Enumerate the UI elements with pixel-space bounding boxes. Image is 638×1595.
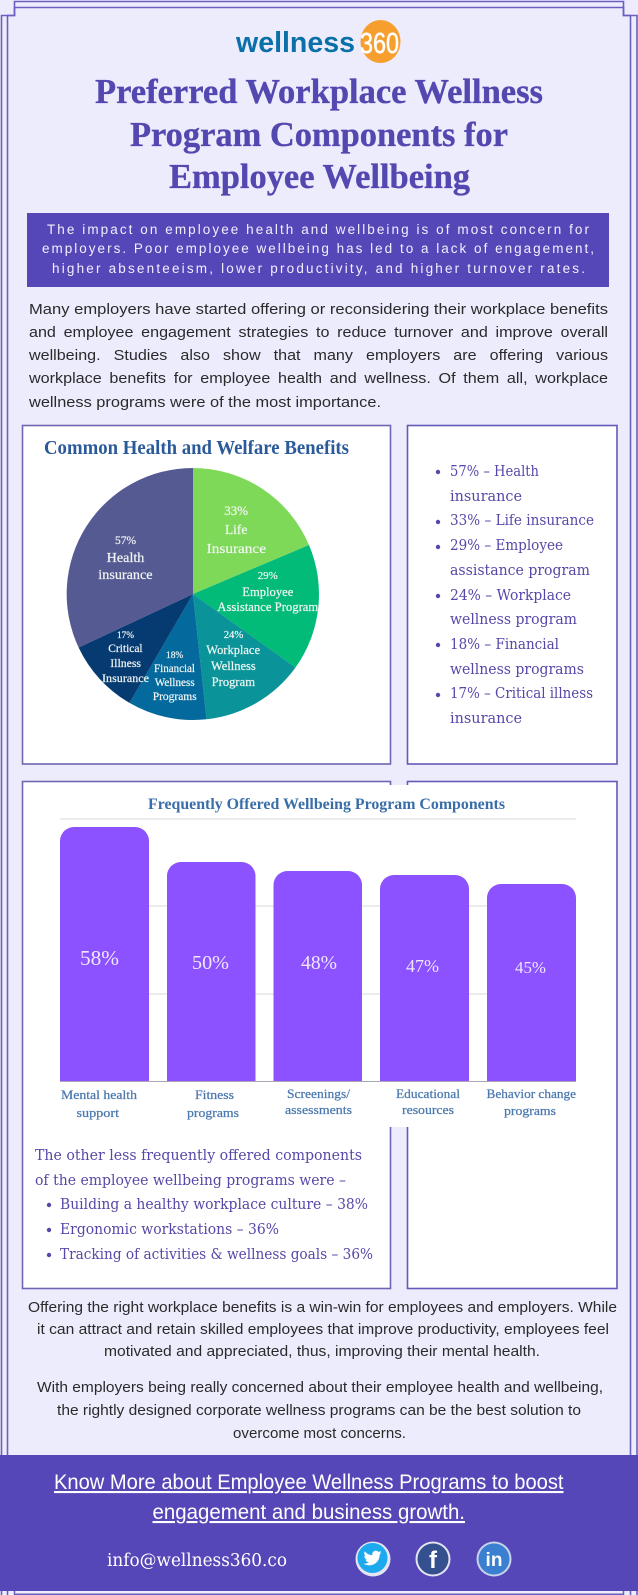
icon: linkedin [476,1542,512,1576]
bar category labels [61,1086,576,1120]
bar chart [60,796,576,1120]
pie chart: 18% [166,651,183,661]
bar values [80,946,546,977]
footer call to action [54,1471,564,1524]
bar category labels: Mental health [61,1087,138,1102]
pie chart: Wellness [211,659,256,673]
closing paragraph 2: the rightly designed corporate wellness programs can be the best solution to [57,1403,581,1419]
other components text: Tracking of activities & wellness goals – 36% [60,1245,373,1263]
icon: twitter [356,1542,390,1576]
panel: benefits list: wellness programs [450,660,584,678]
bar category labels: Screenings/ [287,1086,350,1101]
intro banner: higher absenteeism, lower productivity, and higher turnover rates. [52,261,585,276]
panel: benefits list: 29% – Employee [450,536,563,554]
bar category labels: assessments [285,1102,352,1117]
closing paragraph 1: it can attract and retain skilled employees that improve productivity, employees feel [37,1322,609,1338]
icon: facebook: f [429,1547,438,1574]
pie chart: Life [225,523,247,538]
pie chart: Wellness [155,677,195,689]
bar values: 47% [406,956,439,976]
bar category labels: Educational [396,1086,460,1101]
panel: bar chart and other components, left box [22,782,390,1288]
pie chart: Program [212,675,255,689]
panel: benefits list: insurance [450,487,522,505]
intro banner [27,213,609,287]
closing paragraph 1 [28,1300,617,1360]
footer call to action: engagement and business growth. [152,1501,465,1524]
pie chart: Insurance [102,673,149,685]
closing paragraph 2 [37,1380,603,1442]
pie chart: Health [107,550,145,565]
bar category labels: Behavior change [486,1086,576,1101]
icon: facebook [416,1542,450,1576]
title [95,72,543,196]
bar chart heading: Frequently Offered Wellbeing Program Components [148,796,505,813]
bar category labels: resources [402,1102,454,1117]
pie chart heading: Common Health and Welfare Benefits [44,437,349,459]
intro banner: employers. Poor employee wellbeing has led to a lack of engagement, [42,241,594,256]
bar values: 58% [80,946,119,970]
other components text: of the employee wellbeing programs were – [35,1171,346,1189]
panel: benefits list: 18% – Financial [450,635,559,653]
pie chart: Insurance [207,542,266,557]
other components text: The other less frequently offered components [35,1146,362,1164]
panel: benefits list: 24% – Workplace [450,586,571,604]
title: Employee Wellbeing [169,157,470,196]
pie chart: Programs [153,691,197,703]
pie chart: Employee [242,585,294,599]
pie chart: 24% [224,629,243,641]
panel: benefits list: assistance program [450,561,590,579]
other components text: Building a healthy workplace culture – 38% [60,1195,368,1213]
pie chart [67,468,319,720]
panel: empty right box behind bar chart [389,782,617,1288]
pie chart: 33% [224,503,248,518]
bar values: 45% [515,958,546,977]
pie chart: Illness [110,658,142,670]
intro paragraph: Many employers have started offering or reconsidering their workplace benefits [29,301,608,318]
closing paragraph 2: overcome most concerns. [233,1426,406,1442]
panel: benefits list: 33% – Life insurance [450,511,594,529]
closing paragraph 1: motivated and appreciated, thus, improving their mental health. [104,1344,540,1360]
logo: wellness360 [235,20,400,63]
bars [60,827,576,1081]
pie chart: 29% [258,570,278,582]
intro paragraph: workplace benefits for employee health and wellness. Of them all, workplace [28,370,608,387]
intro paragraph [28,301,608,411]
intro banner: The impact on employee health and wellbeing is of most concern for [47,222,590,237]
bar category labels: programs [504,1103,556,1118]
title: Preferred Workplace Wellness [95,72,543,111]
other components text [35,1146,373,1263]
panel: pie chart [22,426,390,764]
decorative bottom frame [14,1591,624,1594]
bar values: 48% [301,953,337,974]
pie chart: Financial [154,663,195,675]
panel: benefits list [408,426,617,764]
pie chart: insurance [98,567,153,582]
panel: benefits list: insurance [450,709,522,727]
intro paragraph: and employee engagement strategies to reduce turnover and improve overall [29,324,608,341]
closing paragraph 1: Offering the right workplace benefits is a win-win for employees and employers. While [28,1300,617,1316]
footer call to action: Know More about Employee Wellness Programs to boost [54,1471,564,1494]
other components text: Ergonomic workstations – 36% [60,1220,279,1238]
title: Program Components for [130,115,508,154]
intro paragraph: wellbeing. Studies also show that many employers are offering various [28,347,608,364]
panel: benefits list: wellness program [450,610,577,628]
pie chart: Assistance Program [217,600,319,614]
pie chart: Critical [108,643,143,655]
pie chart: 17% [117,631,134,641]
contact email: info@wellness360.co [107,1551,287,1571]
logo: wellness360: 360 [360,28,399,60]
bar category labels: support [76,1105,119,1120]
bar category labels: programs [187,1105,239,1120]
pie chart: 57% [115,535,136,547]
closing paragraph 2: With employers being really concerned about their employee health and wellbeing, [37,1380,603,1396]
bar values: 50% [192,952,229,974]
panel: benefits list: 57% – Health [450,462,539,480]
bar category labels: Fitness [195,1087,234,1102]
logo: wellness360: wellness [235,27,355,59]
intro paragraph: wellness programs were of the most importance. [28,394,381,411]
icon: linkedin: in [486,1550,502,1571]
pie chart: Workplace [206,643,260,657]
footer band [0,1455,638,1591]
panel: benefits list: 17% – Critical illness [450,684,593,702]
